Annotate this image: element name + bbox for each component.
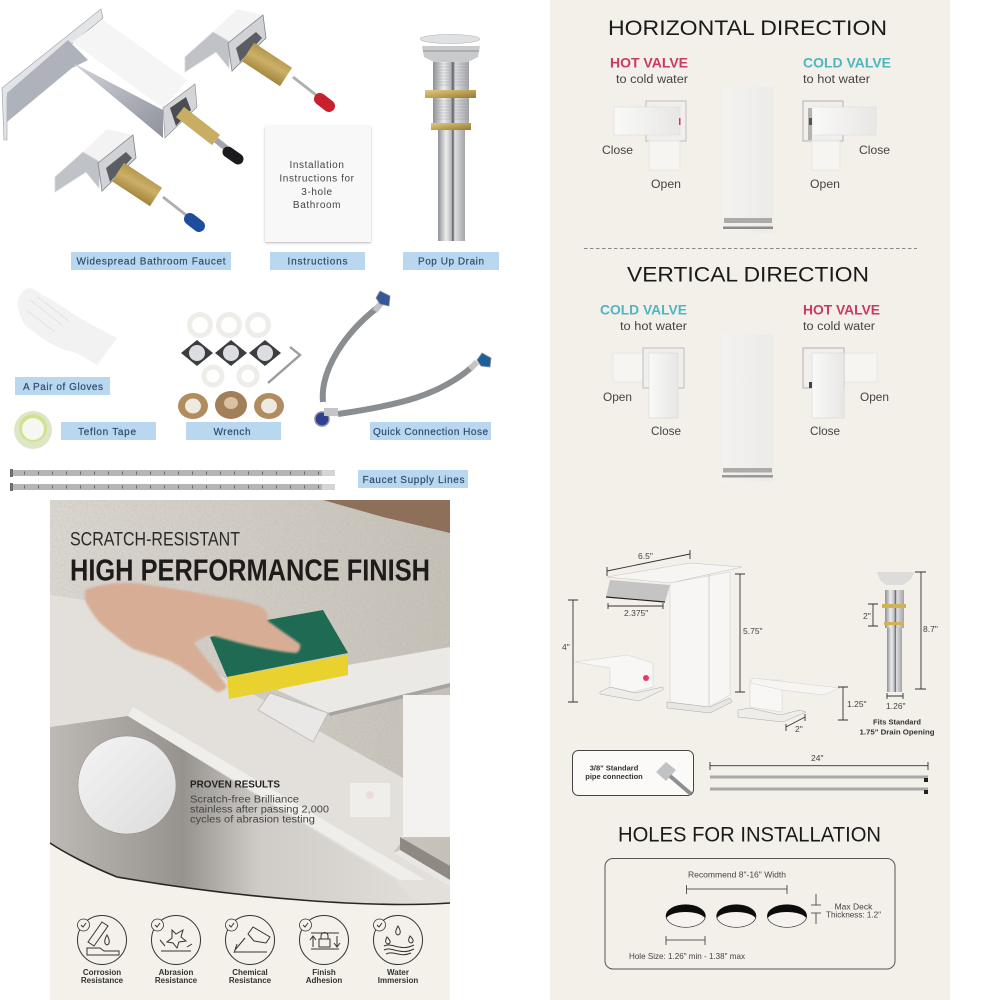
panel background	[550, 0, 950, 1000]
cold valve, horizontal: Open	[810, 177, 840, 191]
label: gloves	[15, 377, 110, 395]
heading: holes for installation: HOLES FOR INSTALLATION	[618, 824, 881, 847]
label: quick connection hose: Quick Connection Hose	[373, 427, 488, 438]
cold valve, horizontal: to hot water	[803, 74, 870, 86]
icon: abrasion resistance	[152, 916, 200, 985]
icon: gloves	[18, 288, 117, 365]
faucet front view, horizontal	[723, 87, 773, 233]
text: proven results: Scratch-free Brilliance	[190, 795, 299, 806]
heading: high performance finish: HIGH PERFORMANCE FINISH	[70, 552, 430, 588]
icon: supply lines	[10, 469, 335, 491]
label: quick connection hose	[370, 422, 491, 440]
text: abrasion label: Abrasion	[159, 968, 193, 977]
panel: holes diagram: Recommend 8"-16" Width	[688, 870, 786, 880]
instructions card	[265, 126, 371, 242]
label: instructions	[270, 252, 365, 270]
label: gloves: A Pair of Gloves	[23, 382, 103, 393]
faucet dimension diagram: 2"	[795, 724, 803, 734]
icon: teflon tape	[14, 411, 52, 449]
circular swatch	[78, 736, 176, 834]
text: proven results: stainless after passing 2,000	[190, 805, 329, 816]
label: teflon tape: Teflon Tape	[78, 427, 136, 438]
faucet dimension diagram: 1.25"	[847, 699, 867, 709]
photo curved edge	[50, 843, 450, 904]
cold valve, vertical: Open	[603, 390, 632, 404]
text: water label: Water	[387, 968, 409, 977]
label: wrench	[186, 422, 281, 440]
instructions card: 3-hole	[301, 187, 333, 198]
hand with sponge	[85, 583, 348, 699]
hot valve, vertical: Open	[860, 390, 889, 404]
instructions card: Bathroom	[293, 200, 341, 211]
icon: water immersion	[374, 916, 422, 985]
heading: horizontal direction: HORIZONTAL DIRECTION	[608, 17, 887, 40]
icon: red valve handle	[185, 9, 329, 106]
dashed divider	[584, 248, 917, 250]
faucet dimension diagram: 5.75"	[743, 626, 763, 636]
hot valve, vertical: to cold water	[803, 321, 875, 333]
label: faucet: Widespread Bathroom Faucet	[76, 256, 226, 268]
instructions card: Instructions for	[279, 174, 355, 184]
panel: holes diagram: Thickness: 1.2"	[826, 910, 881, 920]
drain dimension diagram: 1.26"	[886, 701, 906, 711]
cold valve, vertical: to hot water	[620, 321, 687, 333]
heading: vertical direction: VERTICAL DIRECTION	[627, 264, 869, 287]
text: chemical label line two: Resistance	[229, 976, 272, 985]
panel: installation guide	[550, 0, 950, 1000]
label: drain	[403, 252, 499, 270]
hot valve, horizontal: HOT VALVE	[610, 54, 688, 70]
supply line dimension: 24"	[811, 753, 823, 763]
text: corrosion label: Corrosion	[83, 968, 121, 977]
panel: holes diagram	[605, 858, 895, 969]
cold valve, vertical	[600, 301, 687, 438]
hot valve, horizontal: to cold water	[616, 74, 688, 86]
label: instructions: Instructions	[288, 256, 348, 268]
callout: pipe connection	[572, 750, 694, 796]
hot valve, vertical: HOT VALVE	[803, 301, 880, 317]
label: faucet	[71, 252, 231, 270]
panel: high performance finish	[50, 500, 450, 1000]
cold valve, vertical: COLD VALVE	[600, 301, 687, 317]
hot valve, horizontal: Close	[602, 143, 633, 157]
faucet dimension diagram: 2.375"	[624, 608, 648, 618]
cold valve, horizontal: Close	[859, 143, 890, 157]
supply line dimension	[710, 753, 928, 794]
text: abrasion label line two: Resistance	[155, 976, 198, 985]
callout: pipe connection: pipe connection	[585, 772, 643, 781]
icon: finish adhesion	[300, 916, 348, 985]
instructions card: Installation	[289, 160, 345, 171]
label: drain: Pop Up Drain	[418, 256, 484, 268]
faucet dimension diagram	[562, 550, 867, 734]
faucet front view, vertical	[722, 334, 773, 482]
label: supply lines	[358, 470, 468, 488]
text: proven results: PROVEN RESULTS	[190, 780, 280, 790]
label: wrench: Wrench	[214, 427, 250, 438]
cold valve, vertical: Close	[651, 424, 681, 438]
drain dimension diagram: 2"	[863, 611, 871, 621]
text: proven results: cycles of abrasion testing	[190, 815, 315, 826]
text: finish label: Finish	[312, 968, 336, 977]
faucet dimension diagram: 4"	[562, 642, 570, 652]
bathroom photo scene	[50, 500, 450, 915]
icon: chemical resistance	[226, 916, 274, 985]
text: proven results	[190, 780, 329, 826]
callout: pipe connection: 3/8" Standard	[590, 764, 639, 772]
icon: pop up drain	[420, 34, 480, 241]
hot valve, horizontal: Open	[651, 177, 681, 191]
heading: scratch-resistant: SCRATCH-RESISTANT	[70, 528, 240, 550]
panel background	[50, 500, 450, 1000]
icon: main faucet body	[2, 9, 238, 159]
drain dimension diagram: 1.75" Drain Opening	[860, 728, 935, 736]
icon: washers and gaskets	[178, 314, 300, 419]
drain dimension diagram	[860, 572, 938, 736]
text: chemical label: Chemical	[232, 968, 268, 977]
cold valve, horizontal: COLD VALVE	[803, 54, 891, 70]
label: supply lines: Faucet Supply Lines	[362, 475, 464, 486]
cold valve, horizontal	[803, 54, 891, 191]
icon: corrosion resistance	[78, 916, 126, 985]
panel: parts list	[2, 9, 499, 491]
panel: holes diagram: Hole Size: 1.26" min - 1.38" max	[629, 951, 746, 961]
drain dimension diagram: Fits Standard	[873, 718, 921, 726]
faucet dimension diagram: 6.5"	[638, 551, 653, 561]
panel: holes diagram: Max Deck	[835, 902, 873, 912]
label: teflon tape	[61, 422, 156, 440]
drain dimension diagram: 8.7"	[923, 624, 938, 634]
text: water label line two: Immersion	[378, 976, 418, 985]
icon: blue valve handle	[55, 129, 199, 226]
text: finish label line two: Adhesion	[306, 976, 342, 985]
icon: quick connection hose	[315, 291, 491, 426]
hot valve, vertical: Close	[810, 424, 840, 438]
hot valve, horizontal	[602, 54, 688, 191]
text: corrosion label line two: Resistance	[81, 976, 124, 985]
hot valve, vertical	[803, 301, 889, 438]
